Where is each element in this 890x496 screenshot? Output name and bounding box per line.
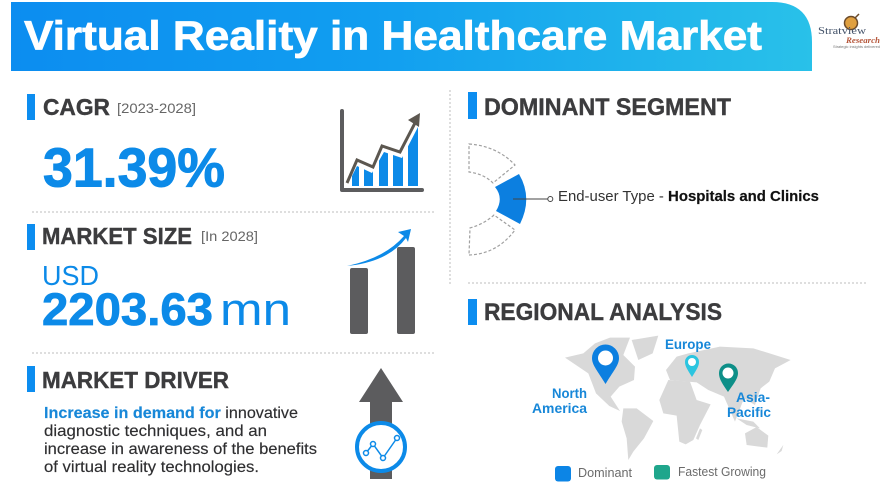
driver text: diagnostic techniques, and an <box>44 423 267 440</box>
driver text: Increase in demand for innovative <box>44 405 298 422</box>
heading: market driver: MARKET DRIVER <box>42 367 229 393</box>
world map <box>565 336 791 460</box>
legend: Dominant <box>578 466 633 480</box>
region labels: Pacific <box>727 405 771 420</box>
panel: regional analysis <box>468 299 791 482</box>
pin: Europe <box>685 355 699 377</box>
panel: dominant segment <box>468 92 819 255</box>
legend: Fastest Growing <box>678 465 766 479</box>
pin: North America <box>592 344 619 384</box>
heading: CAGR: [2023-2028] <box>117 100 196 116</box>
region labels <box>532 337 771 420</box>
heading: CAGR: CAGR <box>43 94 110 120</box>
driver text: of virtual reality technologies. <box>44 459 259 476</box>
market size value: mn <box>220 284 291 335</box>
heading: CAGR <box>27 94 196 120</box>
panel: market driver <box>27 366 405 479</box>
heading: market size <box>27 223 258 250</box>
icon: growth bars with arrow <box>347 229 415 334</box>
driver text <box>44 405 317 476</box>
dividers <box>32 90 868 353</box>
market size value: 2203.63 <box>42 284 213 335</box>
market size value <box>42 260 291 335</box>
heading: regional analysis: REGIONAL ANALYSIS <box>484 299 722 326</box>
panel: market size <box>27 223 415 335</box>
logo: Stratview Research <box>818 14 881 49</box>
heading: market size: [In 2028] <box>201 228 258 244</box>
icon: rising bar chart <box>342 96 424 190</box>
region labels: North <box>552 386 587 401</box>
CAGR value: 31.39% <box>43 136 225 198</box>
heading: dominant segment: DOMINANT SEGMENT <box>484 94 731 121</box>
logo: Stratview Research: Stratview <box>818 26 867 37</box>
region labels: Asia- <box>736 390 770 405</box>
panel: CAGR <box>27 94 424 198</box>
segment chart <box>469 144 553 255</box>
title: Virtual Reality in Healthcare Market <box>24 12 762 58</box>
driver text: increase in awareness of the benefits <box>44 441 317 458</box>
icon: up arrow with chart badge <box>357 368 405 479</box>
logo: Stratview Research: Strategic insights delivered <box>833 45 880 49</box>
pin: Asia-Pacific <box>719 364 738 392</box>
region labels: America <box>532 401 587 416</box>
logo: Stratview Research: Research <box>845 36 881 45</box>
segment label: End-user Type - Hospitals and Clinics <box>558 189 819 205</box>
region labels: Europe <box>665 337 711 352</box>
heading: market size: MARKET SIZE <box>42 223 192 249</box>
header banner <box>11 2 812 71</box>
market size value: USD <box>42 260 99 291</box>
legend <box>555 465 766 482</box>
